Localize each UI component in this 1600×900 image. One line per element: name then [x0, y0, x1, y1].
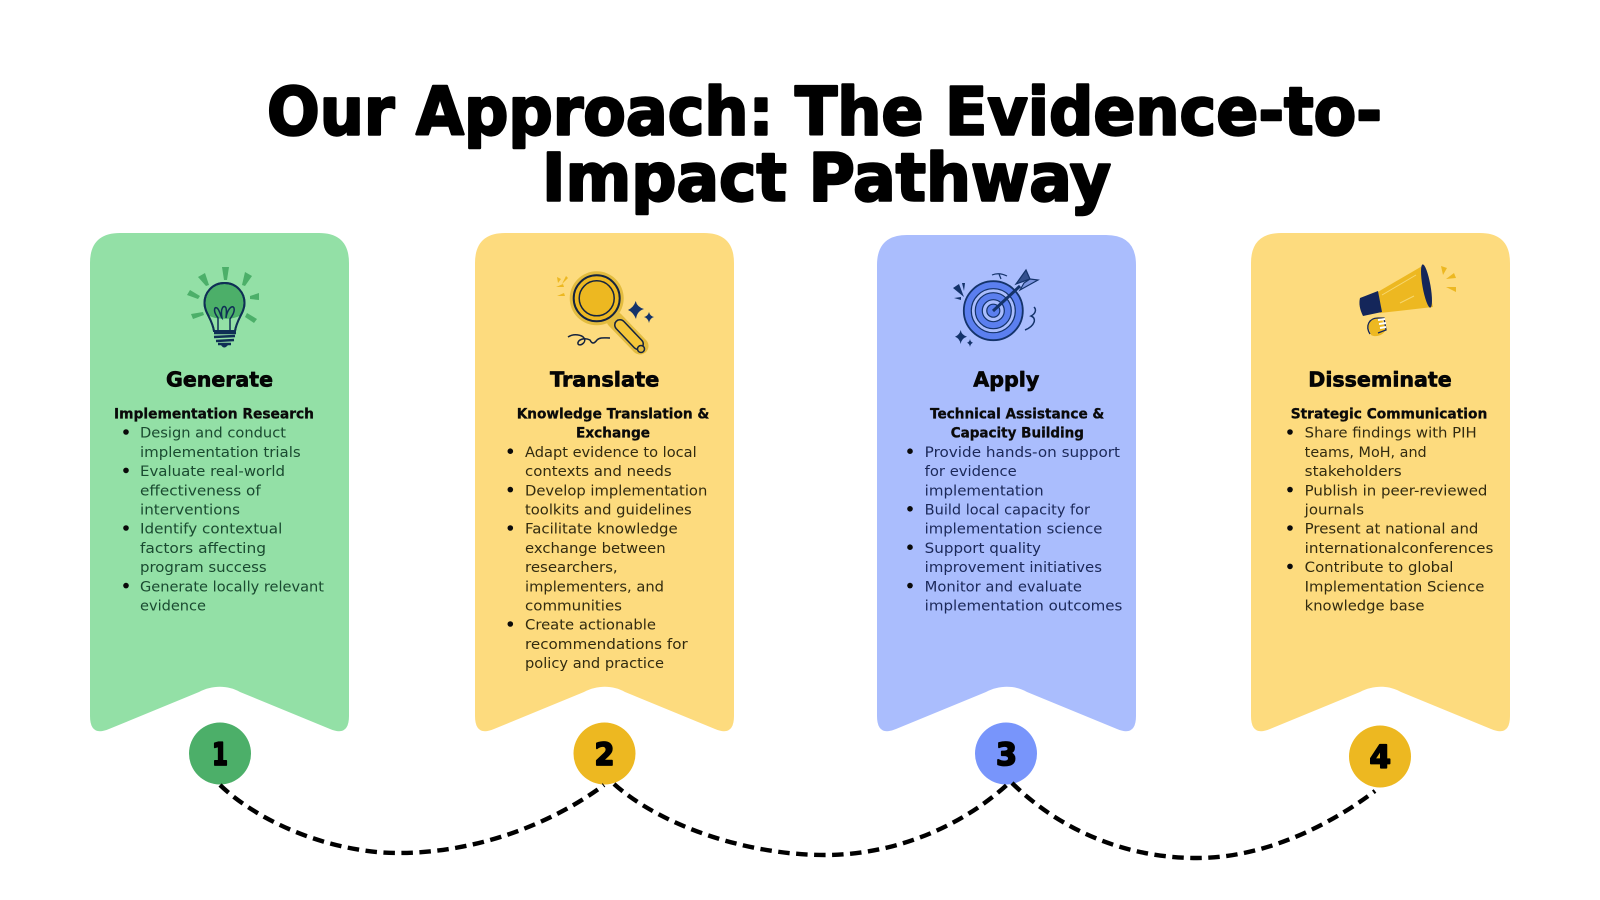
bullet list: disseminate: Implementation Science	[1305, 579, 1484, 595]
dashed connector 1 to 2	[220, 785, 604, 853]
bullet list: apply: implementation	[925, 483, 1044, 499]
icon: light bulb	[187, 267, 259, 348]
step badge 4: 4	[1370, 740, 1391, 776]
title: Our Approach: The Evidence-to-	[267, 74, 1382, 150]
bullet list: translate: recommendations for	[525, 637, 688, 653]
subheading: Technical Assistance & Capacity Building: Capacity Building	[951, 426, 1084, 442]
panel background: translate	[475, 233, 734, 731]
bullet list: translate: Adapt evidence to local	[525, 445, 697, 461]
bullet list: apply: implementation outcomes	[925, 598, 1122, 614]
bullet list: generate: implementation trials	[140, 445, 301, 461]
bullet list: generate: effectiveness of	[140, 483, 262, 499]
bullet list: generate: Evaluate real-world	[140, 464, 285, 480]
bullet list: translate: implementers, and	[525, 579, 664, 595]
bullet list: disseminate: stakeholders	[1305, 464, 1402, 480]
bullet list: disseminate: internationalconferences	[1305, 541, 1493, 557]
bullet list: generate	[123, 426, 324, 614]
bullet list: generate: evidence	[140, 598, 206, 614]
step badge 1: 1	[212, 737, 228, 773]
subheading: Technical Assistance & Capacity Building	[930, 406, 1104, 442]
bullet list: apply: implementation science	[925, 522, 1102, 538]
bullet list: translate: Develop implementation	[525, 483, 707, 499]
subheading: Implementation Research: Implementation Research	[114, 406, 314, 422]
panel: translate	[475, 233, 734, 731]
heading: Apply: Apply	[973, 368, 1039, 392]
subheading: Technical Assistance & Capacity Building: Technical Assistance &	[930, 406, 1104, 422]
bullet list: generate: Generate locally relevant	[140, 579, 324, 595]
heading: Translate: Translate	[550, 368, 659, 392]
bullet list: translate: Facilitate knowledge	[525, 522, 678, 538]
dashed connector 2 to 3	[614, 783, 1009, 855]
icon: magnifying glass	[556, 271, 654, 352]
step badge 3: 3	[996, 737, 1017, 773]
bullet list: disseminate: journals	[1304, 502, 1364, 518]
bullet list: translate: contexts and needs	[525, 464, 672, 480]
heading: Disseminate: Disseminate	[1308, 368, 1452, 392]
bullet list: translate	[508, 445, 707, 672]
bullet list: disseminate: Present at national and	[1305, 522, 1478, 538]
bullet list: disseminate: Contribute to global	[1305, 560, 1453, 576]
panel: apply	[877, 235, 1136, 731]
bullet list: apply: Monitor and evaluate	[925, 579, 1082, 595]
bullet list: generate: interventions	[140, 502, 240, 518]
bullet list: disseminate	[1287, 426, 1493, 614]
panel background: apply	[877, 235, 1136, 731]
bullet list: translate: Create actionable	[525, 618, 656, 634]
step badge 4	[1349, 726, 1411, 788]
bullet list: translate: policy and practice	[525, 656, 664, 672]
panel background: generate	[90, 233, 349, 731]
subheading: Knowledge Translation & Exchange: Exchange	[576, 426, 650, 442]
title	[267, 74, 1382, 216]
bullet list: translate: toolkits and guidelines	[525, 502, 692, 518]
bullet list: generate: Design and conduct	[140, 426, 286, 442]
bullet list: apply	[907, 445, 1122, 614]
heading: Generate: Generate	[166, 368, 273, 392]
bullet list: disseminate: teams, MoH, and	[1305, 445, 1427, 461]
bullet list: apply: for evidence	[925, 464, 1017, 480]
title: Impact Pathway	[542, 140, 1111, 216]
subheading: Knowledge Translation & Exchange: Knowledge Translation &	[517, 406, 709, 422]
step badge 2	[574, 722, 636, 784]
bullet list: generate: program success	[140, 560, 267, 576]
bullet list: apply: Provide hands-on support	[925, 445, 1120, 461]
bullet list: generate: factors affecting	[140, 541, 266, 557]
subheading: Knowledge Translation & Exchange	[517, 406, 709, 442]
bullet list: disseminate: knowledge base	[1305, 598, 1424, 614]
bullet list: disseminate: Share findings with PIH	[1305, 426, 1477, 442]
panel: disseminate	[1251, 233, 1510, 731]
bullet list: apply: improvement initiatives	[925, 560, 1102, 576]
icon: megaphone	[1359, 264, 1456, 336]
bullet list: disseminate: Publish in peer-reviewed	[1305, 483, 1487, 499]
bullet list: apply: Support quality	[925, 541, 1041, 557]
step badge 1	[189, 722, 251, 784]
bullet list: generate: Identify contextual	[140, 522, 282, 538]
bullet list: translate: communities	[525, 598, 622, 614]
bullet list: apply: Build local capacity for	[925, 502, 1090, 518]
bullet list: translate: researchers,	[525, 560, 618, 576]
dashed connector 3 to 4	[1012, 783, 1375, 858]
step badge 2: 2	[594, 737, 614, 773]
step badge 3	[975, 722, 1037, 784]
panel: generate	[90, 233, 349, 731]
bullet list: translate: exchange between	[525, 541, 666, 557]
icon: target with arrow	[953, 270, 1038, 347]
subheading: Strategic Communication: Strategic Communication	[1291, 406, 1487, 422]
panel background: disseminate	[1251, 233, 1510, 731]
